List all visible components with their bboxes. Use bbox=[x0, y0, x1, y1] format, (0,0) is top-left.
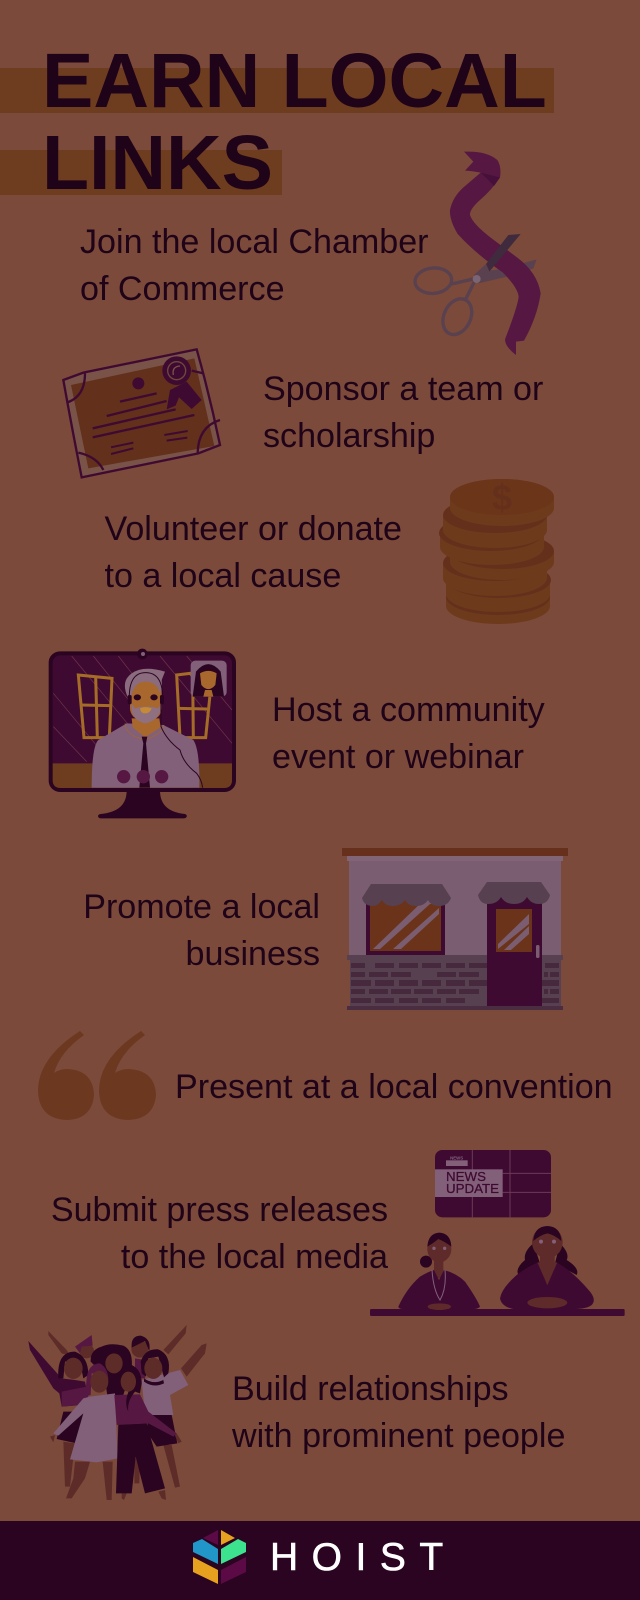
icon: certificate bbox=[63, 349, 220, 477]
icon: news anchors bbox=[370, 1150, 625, 1316]
text: sponsor: Sponsor a team or bbox=[263, 370, 543, 408]
icon: video call monitor bbox=[51, 649, 234, 818]
icon: news anchors: UPDATE bbox=[446, 1181, 499, 1196]
text: volunteer bbox=[104, 510, 402, 595]
text: promote: Promote a local bbox=[83, 888, 320, 926]
footer bar bbox=[0, 1521, 640, 1600]
text: host: Host a community bbox=[272, 691, 545, 729]
text: build relationships bbox=[231, 1370, 565, 1455]
text: promote: business bbox=[186, 935, 320, 973]
text: sponsor bbox=[263, 370, 543, 455]
text: build relationships: with prominent people bbox=[231, 1417, 565, 1455]
title: LINKS bbox=[42, 120, 273, 206]
text: join the chamber bbox=[80, 223, 429, 308]
title: EARN LOCAL bbox=[42, 38, 547, 124]
text: promote bbox=[83, 888, 320, 973]
text: host bbox=[272, 691, 545, 776]
logo: hoist cube bbox=[193, 1530, 246, 1584]
icon: storefront bbox=[342, 848, 568, 1010]
icon: news anchors: NEWS bbox=[450, 1155, 463, 1160]
logo: hoist wordmark: HOIST bbox=[270, 1536, 457, 1579]
icon: stack of coins bbox=[439, 477, 554, 624]
text: press releases: to the local media bbox=[121, 1238, 388, 1276]
text: sponsor: scholarship bbox=[263, 417, 435, 455]
text: join the chamber: of Commerce bbox=[80, 270, 285, 308]
text: volunteer: to a local cause bbox=[104, 557, 341, 595]
icon: group of people bbox=[28, 1325, 207, 1500]
text: join the chamber: Join the local Chamber bbox=[80, 223, 429, 261]
title bbox=[0, 38, 554, 206]
text: press releases: Submit press releases bbox=[51, 1191, 388, 1229]
icon: stack of coins: $ bbox=[492, 477, 512, 518]
text: build relationships: Build relationships bbox=[232, 1370, 509, 1408]
text: volunteer: Volunteer or donate bbox=[104, 510, 402, 548]
text: press releases bbox=[51, 1191, 388, 1276]
text: host: event or webinar bbox=[272, 738, 524, 776]
icon: ribbon and scissors bbox=[414, 152, 541, 355]
text: present: Present at a local convention bbox=[175, 1068, 613, 1106]
icon: quotation marks bbox=[38, 1031, 156, 1120]
icon: news anchors: NEWS bbox=[446, 1169, 486, 1184]
